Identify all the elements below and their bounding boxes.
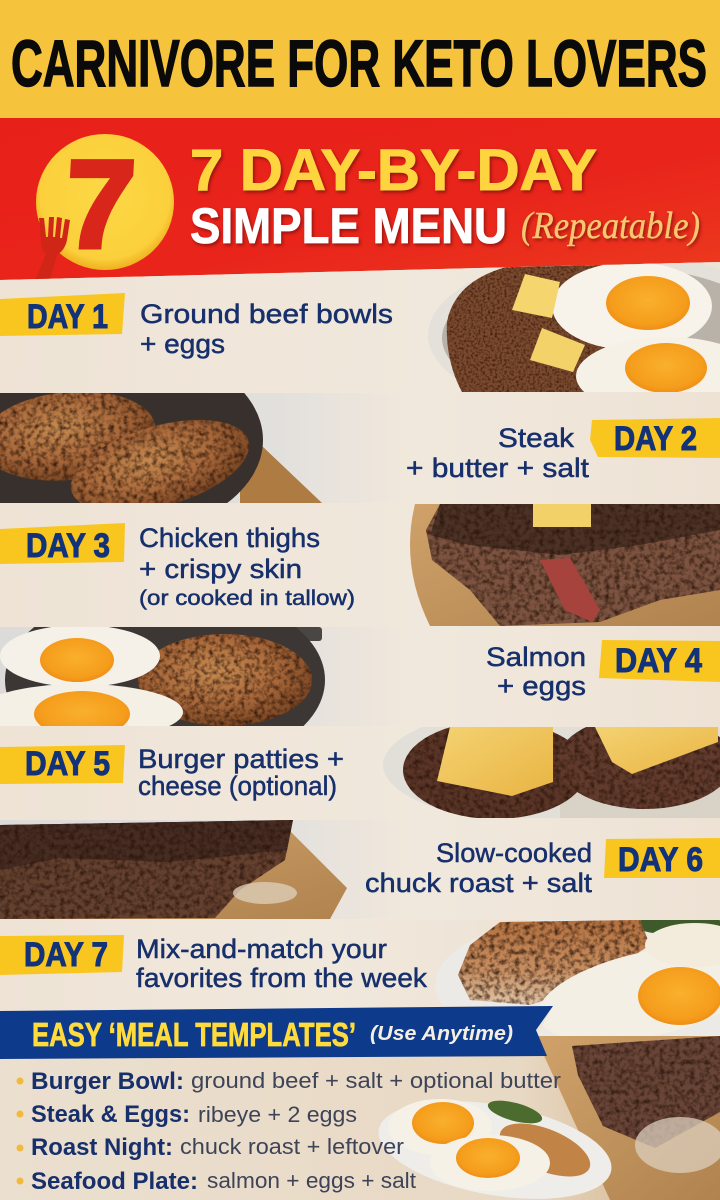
day 2 text line two: + butter + salt [406, 453, 590, 483]
day 5 tag [0, 745, 125, 784]
list: burger bowl [16, 1068, 561, 1095]
day 3 tag [0, 523, 125, 564]
day 5 row [0, 727, 720, 818]
day 5 text line two: cheese (optional) [138, 771, 337, 801]
icon: fork [35, 217, 70, 280]
list: roast night: Roast Night: [31, 1134, 173, 1161]
day 7 row [0, 920, 720, 1036]
day 3 text line two: + crispy skin [139, 554, 302, 584]
day 2 label: DAY 2 [614, 420, 697, 458]
list: steak and eggs: Steak & Eggs: [31, 1101, 190, 1128]
day 6 text: Slow-cooked [436, 838, 592, 868]
day 3 row [0, 504, 720, 626]
title band [0, 0, 720, 118]
day 2 tag [590, 418, 720, 458]
list: steak and eggs [16, 1101, 357, 1128]
list: burger bowl: Burger Bowl: [31, 1068, 184, 1095]
photo: roast steak on board [535, 1036, 720, 1200]
icon: yellow plate [36, 134, 174, 270]
day 1 label: DAY 1 [27, 298, 108, 336]
heading line one: 7 DAY-BY-DAY [190, 138, 597, 203]
day 2 text: Steak [498, 423, 575, 453]
photo: sliced steak with butter [410, 504, 720, 626]
list: seafood plate [16, 1168, 416, 1195]
banner note: (Use Anytime) [370, 1023, 513, 1045]
day 6 text line two: chuck roast + salt [365, 868, 593, 898]
photo: eggs and salmon in skillet [0, 627, 325, 726]
day 7 text line two: favorites from the week [136, 963, 428, 993]
photo: chuck roast on board [0, 820, 347, 919]
banner [0, 1006, 553, 1059]
day 3 label: DAY 3 [26, 527, 110, 565]
day 7 tag [0, 935, 124, 975]
day 4 text: Salmon [486, 642, 586, 672]
list: seafood plate: salmon + eggs + salt [207, 1168, 416, 1193]
meal templates panel [0, 1006, 720, 1200]
day 1 tag [0, 293, 125, 336]
list: burger bowl: ground beef + salt + optional butter [191, 1068, 561, 1093]
day 4 row [0, 627, 720, 726]
day 5 text: Burger patties + [138, 744, 344, 774]
day 3 text: Chicken thighs [139, 523, 320, 553]
day 2 row [0, 393, 720, 503]
day 4 tag [599, 640, 720, 682]
repeatable note: (Repeatable) [521, 205, 700, 247]
list: seafood plate: Seafood Plate: [31, 1168, 198, 1195]
list: roast night: chuck roast + leftover [180, 1134, 404, 1159]
day 4 label: DAY 4 [615, 642, 702, 680]
day 7 text: Mix-and-match your [136, 934, 387, 964]
day 6 label: DAY 6 [618, 841, 703, 879]
day 7 label: DAY 7 [24, 936, 108, 974]
day 6 row [0, 820, 720, 919]
day 3 note: (or cooked in tallow) [139, 587, 355, 610]
big seven numeral: 7 [62, 136, 138, 274]
day 1 text: Ground beef bowls [140, 299, 393, 329]
photo: burger patties with cheese [383, 727, 720, 818]
photo: chicken thighs in skillet [0, 393, 322, 503]
red header panel [0, 118, 720, 280]
day 5 label: DAY 5 [25, 745, 110, 783]
day 1 text line two: + eggs [140, 329, 225, 359]
heading line two: SIMPLE MENU [190, 198, 507, 254]
banner heading: EASY ‘MEAL TEMPLATES’ [32, 1016, 356, 1053]
list: steak and eggs: ribeye + 2 eggs [198, 1102, 357, 1127]
day 4 text line two: + eggs [497, 671, 586, 701]
day 1 row [0, 262, 720, 392]
photo: salmon and eggs plate [435, 920, 720, 1036]
photo: eggs plate [371, 1085, 619, 1200]
day 6 tag [604, 838, 720, 878]
list: roast night [16, 1134, 404, 1161]
photo: ground beef bowl with eggs [428, 262, 720, 392]
